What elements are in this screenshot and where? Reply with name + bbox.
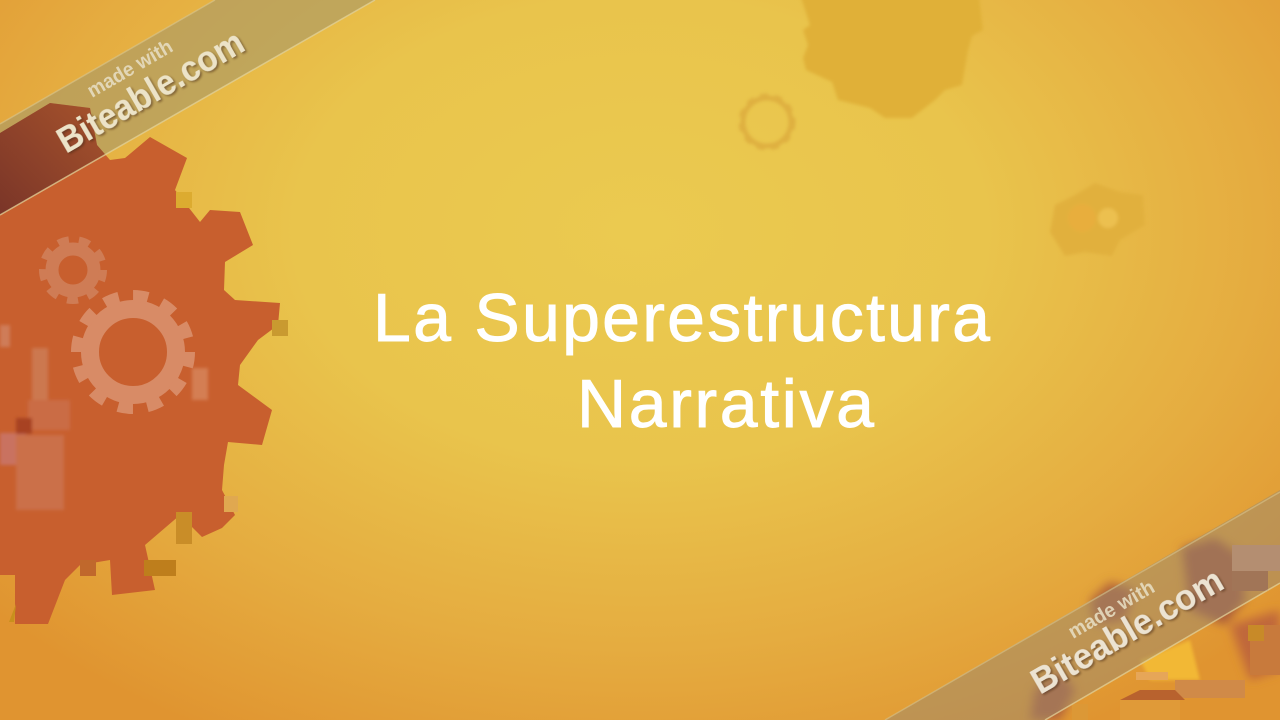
compression blocks on gear <box>0 325 208 510</box>
title: La Superestructura <box>373 280 990 356</box>
banner label: made with <box>1064 576 1159 643</box>
gear: inner large light <box>77 296 189 408</box>
bottom right banner <box>885 490 1280 720</box>
banner brand: Biteable.com <box>50 21 251 161</box>
gear: inner small light <box>43 240 103 300</box>
title <box>373 280 990 442</box>
stray compression blocks <box>0 192 288 622</box>
title: Narrativa <box>577 366 874 442</box>
gear: large orange <box>0 103 280 624</box>
gear: top faded <box>798 0 983 118</box>
banner label: made with <box>84 36 177 102</box>
gear: right faded <box>1050 183 1145 256</box>
banner brand: Biteable.com <box>1024 559 1230 702</box>
bottom right blurred gear <box>1030 538 1280 720</box>
gear seen through banner <box>0 103 110 215</box>
gear: small ring <box>740 95 794 149</box>
top left banner <box>0 0 375 215</box>
